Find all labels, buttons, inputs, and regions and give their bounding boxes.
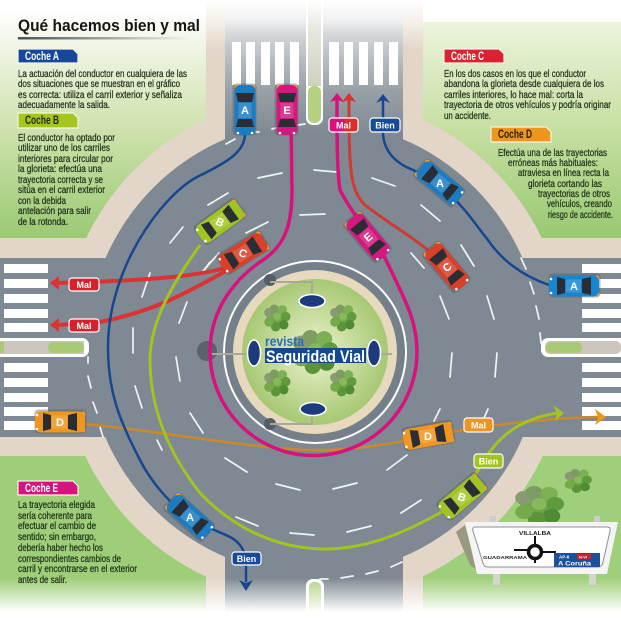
text: Coche B: sitúa en el carril exterior — [18, 185, 106, 196]
sign blue box: A Coruña — [558, 562, 592, 568]
car A lower left: A — [186, 512, 194, 524]
car A lower left — [162, 491, 217, 543]
badge: Coche B: Coche B — [25, 113, 59, 127]
car E right — [341, 209, 393, 265]
text: Coche E — [18, 500, 138, 586]
car C right — [420, 239, 472, 295]
text: Coche D: erróneas más habituales: — [508, 158, 598, 169]
island direction signs — [248, 294, 380, 416]
car E top: E — [283, 105, 291, 117]
car C left — [215, 228, 272, 276]
label: Mal left lower: Mal — [76, 321, 92, 331]
pavement top fade — [206, 0, 423, 50]
text: Coche D: glorieta cortando las — [528, 179, 602, 190]
text: Coche B: interiores para circular por — [18, 154, 114, 165]
logo: Seguridad Vial: Seguridad Vial — [266, 347, 365, 366]
text: Coche E: carril y encontrarse en el exterior — [18, 564, 138, 575]
title underline — [18, 37, 190, 40]
lane markings — [88, 124, 541, 579]
label: Mal left lower — [69, 319, 99, 332]
path: green car B — [150, 245, 564, 549]
text: Coche A: La actuación del conductor en cualquiera de las — [18, 69, 187, 80]
panel: bottom-right field — [415, 432, 621, 621]
label: Mal right: Mal — [471, 420, 486, 430]
car B left — [192, 196, 248, 246]
car E right: E — [362, 231, 375, 245]
badge: Coche A: Coche A — [25, 49, 59, 63]
sign blue box — [554, 553, 600, 568]
label: Mal left upper: Mal — [76, 280, 92, 290]
text: Coche C: carriles interiores, lo hace mal: corta la — [444, 90, 583, 101]
car B right: B — [456, 491, 467, 505]
logo: Seguridad Vial: revista — [265, 333, 304, 349]
island trees — [264, 304, 356, 396]
panel: Coche E — [18, 481, 138, 586]
path: orange car D — [60, 409, 606, 450]
label: Mal left upper — [69, 278, 99, 291]
road sign: GUADARRAMA — [483, 555, 528, 560]
panel: top-right field — [418, 22, 621, 244]
car A right — [548, 274, 600, 298]
title: Qué hacemos bien y mal — [18, 16, 200, 35]
label: Bien bottom: Bien — [237, 554, 256, 564]
road top arm — [225, 0, 403, 135]
text: Coche B: con la debida — [18, 196, 66, 207]
text: Coche B: antelación para salir — [18, 206, 92, 217]
logo: Seguridad Vial — [265, 333, 366, 366]
car A top: A — [241, 105, 249, 117]
car B left: B — [214, 216, 226, 230]
text: Coche C: un accidente. — [444, 111, 491, 122]
car D left: D — [56, 417, 64, 429]
car D left — [34, 410, 86, 434]
badge: Coche D: Coche D — [498, 127, 532, 141]
label: Bien top: Bien — [375, 120, 395, 130]
text: Coche C — [444, 69, 612, 122]
text: Coche E: efectuar el cambio de — [18, 521, 96, 532]
label: Bien bottom — [232, 552, 261, 565]
bottom white strip — [0, 612, 621, 621]
car A upper right — [412, 157, 467, 209]
road sign: VILLALBA — [519, 531, 551, 537]
path: blue car A left — [108, 135, 253, 591]
path: red car C left — [50, 268, 228, 332]
car C right: C — [441, 261, 455, 275]
label: Bien green: Bien — [479, 456, 498, 466]
panel: Coche B — [18, 113, 116, 228]
badge: Coche C: Coche C — [451, 49, 484, 63]
panel: Coche A — [18, 49, 187, 111]
text: Coche A: es correcta: utiliza el carril exterior y señaliza — [18, 90, 182, 101]
car A right: A — [570, 281, 578, 293]
text: Coche A — [18, 69, 187, 111]
car E top — [274, 84, 298, 136]
text: Coche E: La trayectoria elegida — [18, 500, 95, 511]
text: Coche E: sería coherente para — [18, 511, 92, 522]
sign blue box: AP-6 — [559, 554, 570, 560]
label: Mal right — [464, 418, 493, 432]
path: magenta car E — [210, 93, 417, 456]
roundabout island — [197, 261, 406, 443]
text: Coche C: En los dos casos en los que el conductor — [444, 69, 587, 80]
car B right — [434, 470, 490, 522]
car D right: D — [424, 431, 432, 443]
label: Bien top — [370, 118, 400, 132]
crosswalks — [4, 42, 621, 430]
path: blue car A right — [376, 94, 549, 285]
text: Coche B: trayectoria correcta y se — [18, 175, 103, 186]
label: Mal top — [329, 118, 358, 132]
trees bottom right — [515, 469, 592, 526]
label: Mal top: Mal — [336, 120, 351, 130]
car C left: C — [237, 247, 248, 261]
road sign — [456, 516, 618, 585]
panel: Coche C — [444, 49, 612, 122]
text: Coche B: El conductor ha optado por — [18, 133, 116, 144]
sign roundabout icon — [514, 536, 556, 563]
car A top — [232, 84, 256, 136]
text: Coche B: utilizar uno de los carriles — [18, 143, 110, 154]
label: Bien green — [474, 454, 503, 468]
text: Coche A: adecuadamente la salida. — [18, 100, 110, 111]
panel: top-left field — [0, 10, 210, 245]
text: Coche A: dos situaciones que se muestran en el gráfico — [18, 79, 180, 90]
text: Coche B: de la rotonda. — [18, 217, 68, 228]
text: Coche E: correspondientes cambios de — [18, 554, 121, 565]
sign blue box: N-VI — [579, 554, 587, 560]
text: Coche B — [18, 133, 116, 228]
car D right — [401, 419, 456, 452]
badge: Coche E: Coche E — [25, 481, 58, 495]
text: Coche E: antes de salir. — [18, 575, 67, 586]
text: Coche E: sentido; sin embargo, — [18, 532, 96, 543]
text: Coche E: debería haber hecho los — [18, 543, 103, 554]
text: Coche B: la glorieta: efectúa una — [18, 164, 102, 175]
path: red car C right — [342, 93, 447, 267]
text: Coche D — [498, 148, 613, 221]
bottom fade — [0, 578, 621, 612]
panel: bottom-left field — [0, 432, 215, 621]
panel: Coche D — [491, 127, 613, 221]
car A upper right: A — [436, 178, 444, 190]
